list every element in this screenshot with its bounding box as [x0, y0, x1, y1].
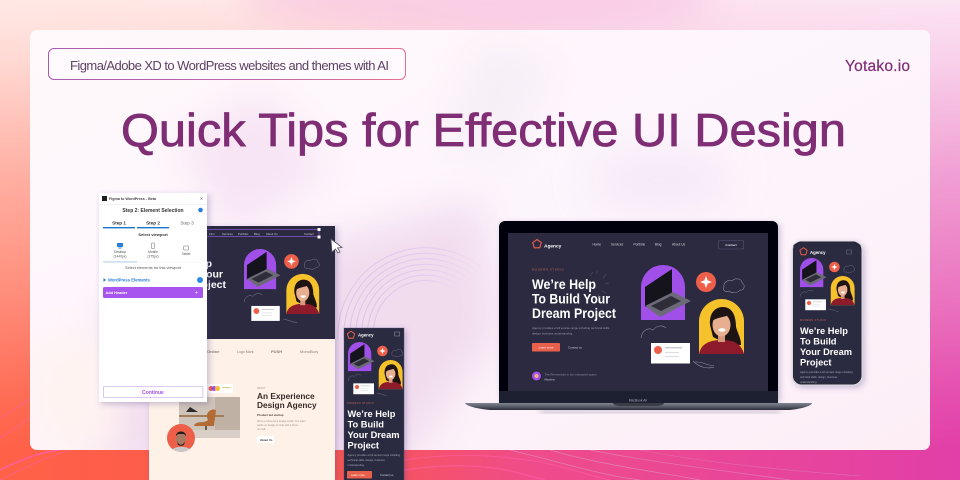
- mobile mockup: left: understanding.: [348, 463, 365, 467]
- decorative concentric arcs: [338, 248, 482, 340]
- plugin panel: Figma to WordPress: [99, 193, 207, 402]
- step tabs: [103, 220, 194, 228]
- viewport picker: Select viewport: [138, 232, 168, 237]
- viewport picker: Mobile: [148, 250, 158, 254]
- phone mockup: Project: [800, 358, 832, 368]
- laptop screen: Dream Project: [532, 305, 616, 321]
- laptop base: [465, 403, 812, 413]
- WordPress elements heading: [104, 277, 203, 283]
- laptop screen: Agency: [544, 244, 562, 250]
- about section text: About Us: [260, 438, 273, 442]
- about section text: We’re a full-service design studio. Our team: [257, 420, 305, 423]
- mobile mockup: left: technical skills, design, business: [348, 458, 386, 462]
- laptop screen: Contact us: [568, 346, 582, 350]
- phone mockup: To Build: [800, 336, 837, 346]
- viewport picker: Select elements for this viewport: [125, 265, 182, 270]
- dark hero section: Blog: [254, 232, 260, 236]
- step tabs: Step 1: [112, 220, 126, 226]
- add header button: [103, 287, 203, 298]
- WordPress elements heading: WordPress Elements: [108, 278, 150, 282]
- client logos row: MonoBury: [300, 349, 318, 354]
- about section text: on craft.: [257, 428, 266, 431]
- office photo: [179, 397, 240, 438]
- dark hero section: Services: [222, 232, 233, 236]
- small stat card: [207, 384, 233, 393]
- model label: MacBook Air: [629, 398, 648, 402]
- laptop screen: Maxima: [544, 378, 555, 382]
- laptop screen: Contact: [725, 243, 737, 247]
- phone mockup: Agency: [810, 250, 826, 255]
- dark hero section: [149, 226, 335, 339]
- illustration: hero art: [244, 249, 319, 323]
- mobile mockup: left: We’re Help: [348, 409, 396, 419]
- plugin header: ×: [200, 196, 203, 202]
- about section text: Design Agency: [257, 400, 317, 410]
- viewport picker: Tablet: [182, 252, 190, 256]
- laptop screen: design, business understanding.: [532, 332, 573, 336]
- about section text: An Experience: [257, 391, 315, 401]
- laptop screen: Learn more: [539, 346, 554, 350]
- step tabs: Step 2: [146, 220, 160, 226]
- laptop screen: Blog: [655, 242, 662, 246]
- laptop screen: Agency provides a full service range including technical skills,: [532, 326, 610, 330]
- badge: product tagline: [48, 48, 406, 80]
- badge: product tagline: Figma/Adobe XD to WordPress websites and themes with AI: [70, 58, 389, 73]
- client logos row: Online: [207, 349, 220, 354]
- step heading: Step 2: Element Selection: [122, 208, 184, 214]
- phone mockup: Agency provides a full service range including: [800, 370, 853, 374]
- laptop screen: Portfolio: [634, 242, 645, 246]
- plugin header: [99, 196, 207, 204]
- dark hero section: Dream Project: [155, 279, 226, 291]
- mobile mockup: left: Project: [348, 440, 379, 450]
- laptop screen: To Build Your: [532, 290, 610, 306]
- about section text: works on design to code with a focus: [257, 424, 299, 427]
- about section text: Product led startup: [257, 413, 284, 417]
- dark hero section: We’re Help: [158, 258, 212, 270]
- mobile mockup: left: To Build: [348, 420, 384, 430]
- phone mockup: Your Dream: [800, 347, 852, 357]
- phone mockup: understanding.: [800, 380, 817, 384]
- mobile mockup: left: Contact us: [380, 473, 394, 477]
- mobile mockup: left: Your Dream: [348, 430, 400, 440]
- about section text: ABOUT: [257, 387, 266, 390]
- mouse cursor: [331, 239, 342, 253]
- laptop screen: [508, 233, 768, 391]
- dark hero section: Contact: [304, 232, 314, 236]
- add header button: Add Header: [106, 290, 128, 295]
- title: Quick Tips for Effective UI Design: [121, 104, 846, 156]
- mobile mockup: left: MODERN STUDIO: [348, 402, 374, 405]
- avatar: man: [167, 424, 195, 452]
- continue button: Continue: [142, 390, 164, 396]
- mobile mockup: left: Learn more: [351, 473, 365, 477]
- laptop screen: MODERN STUDIO: [532, 268, 565, 272]
- brand name: Yotako.io: [845, 58, 910, 75]
- laptop screen: About Us: [672, 242, 686, 246]
- laptop lid: [499, 221, 778, 402]
- viewport picker: [103, 232, 203, 270]
- laptop screen: Home: [592, 242, 601, 246]
- plugin header: Figma to WordPress - Beta: [109, 197, 157, 201]
- continue button: [103, 386, 203, 398]
- add header button: +: [195, 290, 198, 296]
- about section text: [257, 387, 317, 443]
- mobile mockup: left: Agency: [358, 332, 374, 338]
- viewport picker: (1440px): [113, 254, 127, 258]
- client logos row: PUSH: [271, 349, 282, 354]
- dark hero section: Portfolio: [238, 232, 249, 236]
- scribble arrow: [693, 361, 714, 368]
- viewport picker: (375px): [147, 254, 159, 258]
- client logos row: [207, 349, 318, 354]
- dark hero section: Firm: [209, 232, 215, 236]
- mobile mockup: left: Agency provides a full service range including: [348, 453, 401, 457]
- website mockup: desktop: [149, 226, 335, 480]
- viewport picker: Desktop: [114, 250, 126, 254]
- client logos row: Logo Mark: [237, 350, 254, 354]
- dark hero section: About Us: [266, 232, 278, 236]
- laptop screen: The Reinventors in the interactive space: [544, 372, 597, 376]
- phone mockup: technical skills, design, business: [800, 375, 838, 379]
- laptop screen: Services: [611, 242, 624, 246]
- phone mockup: [792, 242, 862, 385]
- step tabs: Step 3: [180, 220, 194, 226]
- sparkle marks: [590, 270, 609, 298]
- mobile mockup: left: [344, 328, 404, 480]
- phone mockup: MODERN STUDIO: [800, 319, 826, 322]
- laptop screen: We’re Help: [532, 276, 596, 292]
- phone mockup: We’re Help: [800, 326, 848, 336]
- dark hero section: To Build Your: [156, 268, 223, 280]
- laptop mockup: [465, 221, 812, 413]
